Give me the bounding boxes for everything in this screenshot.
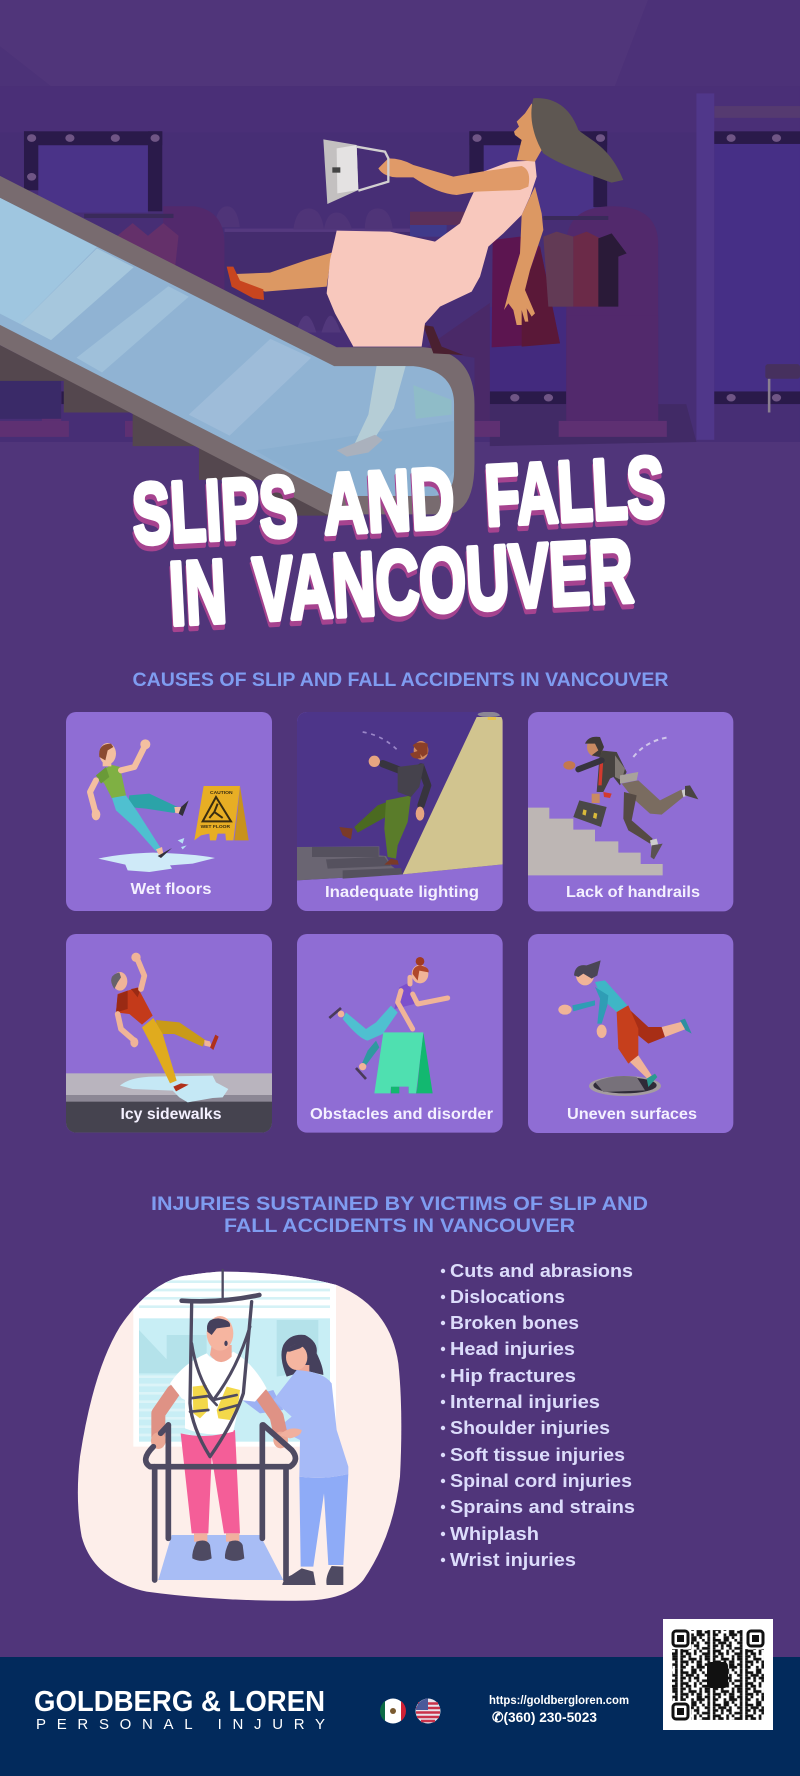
title	[129, 439, 668, 650]
woman's front arm	[378, 158, 529, 195]
woman tripping on manhole	[558, 960, 692, 1087]
mirror frames with bulbs	[24, 131, 800, 404]
list item: Head injuries	[450, 1339, 575, 1359]
injuries list	[441, 1261, 635, 1570]
card labels	[120, 881, 700, 1123]
label: obstacles and disorder: Obstacles and disorder	[310, 1106, 493, 1123]
man slipping	[90, 739, 189, 858]
wet floor sign: WET FLOOR	[201, 824, 231, 829]
green A-frame sign	[374, 1032, 433, 1093]
title line 2	[166, 521, 636, 650]
list item: Hip fractures	[450, 1366, 576, 1386]
heading: causes: CAUSES OF SLIP AND FALL ACCIDENTS IN VANCOUVER	[132, 670, 669, 691]
label: inadequate lighting: Inadequate lighting	[325, 884, 479, 901]
title line 1	[129, 439, 668, 568]
hair	[531, 98, 623, 183]
window with blinds and city	[133, 1270, 336, 1447]
logo: Goldberg & Loren: GOLDBERG & LOREN	[34, 1686, 325, 1718]
list item: Spinal cord injuries	[450, 1471, 632, 1491]
woman's leg	[235, 253, 332, 292]
businessman stumbling upstairs	[563, 737, 698, 859]
contact details: ✆(360) 230-5023	[492, 1709, 597, 1725]
walker frame	[146, 1425, 295, 1580]
panel: bottom-left and bottom-middle cards	[66, 934, 503, 1133]
illustration: patient in rehabilitation harness	[78, 1270, 401, 1601]
clothing racks and bases	[0, 206, 667, 437]
icon: USA flag	[416, 1698, 440, 1724]
patient	[151, 1316, 302, 1561]
escalator stairs underside	[0, 345, 332, 516]
heading: injuries	[151, 1194, 648, 1237]
panel: top-left and top-middle cards	[66, 712, 503, 911]
label: uneven surfaces: Uneven surfaces	[567, 1106, 697, 1123]
handbag	[323, 139, 388, 204]
list item: Wrist injuries	[450, 1550, 576, 1570]
hanging clothes	[410, 212, 627, 355]
contact details	[489, 1693, 629, 1725]
list item: Whiplash	[450, 1524, 539, 1544]
store back wall	[0, 0, 800, 446]
card: lack of handrails	[528, 712, 733, 911]
logo: Goldberg & Loren: PERSONAL INJURY	[36, 1716, 325, 1733]
logo: Goldberg & Loren	[34, 1686, 325, 1733]
label: lack of handrails: Lack of handrails	[566, 884, 700, 901]
QR code	[663, 1619, 773, 1730]
escalator glass panel	[0, 198, 454, 496]
list item: Dislocations	[450, 1287, 565, 1307]
list item: Soft tissue injuries	[450, 1445, 625, 1465]
card: inadequate lighting	[297, 712, 503, 911]
title line 1: FALLS	[482, 439, 667, 544]
label: icy sidewalks: Icy sidewalks	[120, 1106, 222, 1123]
neck and face	[514, 103, 542, 162]
title line 1: FALLS	[482, 444, 667, 549]
woman falling with handbag, and the clothes behind her	[227, 98, 627, 355]
card: obstacles and disorder	[297, 934, 503, 1133]
title line 1: SLIPS	[130, 458, 300, 563]
escalator handrail band	[0, 176, 474, 514]
title line 1: AND	[320, 455, 456, 558]
man slipping on ice	[111, 953, 219, 1091]
title line 2: IN	[167, 542, 229, 645]
card: uneven surfaces	[528, 934, 733, 1133]
physiotherapist	[240, 1335, 348, 1585]
wet floor sign	[194, 786, 249, 840]
treadmill mat	[158, 1535, 283, 1580]
title line 2: IN	[166, 547, 228, 650]
woman tripping over sign	[329, 957, 448, 1079]
label: wet floors: Wet floors	[130, 881, 212, 898]
list item: Shoulder injuries	[450, 1418, 610, 1438]
list item: Broken bones	[450, 1313, 579, 1333]
panel: right column cards	[528, 712, 733, 1133]
heading: injuries: INJURIES SUSTAINED BY VICTIMS OF SLIP AND	[151, 1194, 648, 1215]
title line 1: SLIPS	[129, 463, 299, 568]
open manhole	[589, 1076, 661, 1096]
harness	[182, 1270, 259, 1457]
puddle	[98, 853, 215, 872]
flag icons	[380, 1698, 440, 1724]
list item: Cuts and abrasions	[450, 1261, 633, 1281]
red shoe	[227, 267, 264, 300]
bench	[765, 364, 800, 412]
shelves with handbags	[214, 206, 418, 333]
hero background: store and escalator	[0, 0, 800, 516]
man stumbling in the dark	[339, 741, 428, 865]
dashed fall path	[363, 732, 398, 750]
footer band	[0, 1657, 800, 1776]
card: icy sidewalks	[66, 934, 272, 1133]
wet floor sign: CAUTION	[210, 790, 233, 795]
contact details: https://goldbergloren.com	[489, 1693, 629, 1707]
heading: injuries: FALL ACCIDENTS IN VANCOUVER	[224, 1216, 575, 1237]
pink dress	[327, 161, 537, 347]
icon: Mexico flag	[380, 1698, 406, 1724]
glass reflections and leg seen through glass	[0, 198, 454, 496]
list item: Internal injuries	[450, 1392, 600, 1412]
title line 1: AND	[321, 450, 457, 553]
list item: Sprains and strains	[450, 1497, 635, 1517]
woman's arm behind dress	[504, 187, 543, 325]
card: wet floors	[66, 712, 272, 911]
cream blob background	[78, 1272, 401, 1601]
